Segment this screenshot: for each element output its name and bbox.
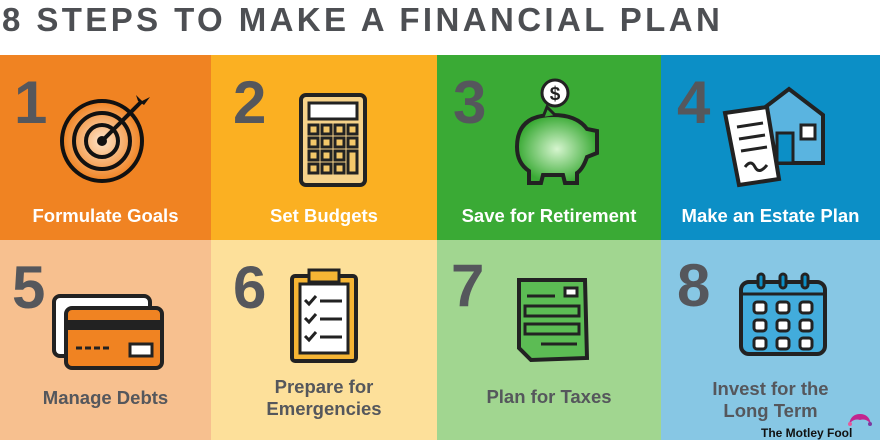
panel: make an estate plan: 4 [677,69,710,136]
logo: the motley fool: The Motley Fool [761,426,852,440]
label [712,378,829,421]
icon: house and document [722,86,825,188]
label: Formulate Goals [32,205,178,226]
panel: save for retirement [437,55,661,240]
panel: plan for taxes: 7 [451,252,484,319]
panel: set budgets: 2 [233,69,266,136]
label: Invest for the [712,378,829,399]
label: Emergencies [266,398,382,419]
panel: prepare for emergencies: 6 [233,254,266,321]
label: Save for Retirement [462,205,636,226]
label: Set Budgets [270,205,378,226]
panel: formulate goals [0,55,211,240]
panel: invest for the long term [661,240,880,440]
panel: manage debts [0,240,211,440]
panel: prepare for emergencies [211,240,437,440]
icon: calendar [739,272,827,356]
label: Long Term [723,400,818,421]
panel: make an estate plan [661,55,880,240]
label: Manage Debts [43,387,168,408]
panel: invest for the long term: 8 [677,252,710,319]
icon: piggy bank with coin [515,78,599,185]
icon: piggy bank with coin: $ [550,84,561,105]
icon: calculator [299,93,367,187]
panel: plan for taxes [437,240,661,440]
logo: the motley fool [761,414,872,440]
label: Prepare for [275,376,373,397]
label [266,376,382,419]
icon: credit cards [52,294,164,370]
panel: set budgets [211,55,437,240]
icon: target [60,95,150,183]
title: 8 STEPS TO MAKE A FINANCIAL PLAN [2,1,723,38]
label: Plan for Taxes [486,386,612,407]
label: Make an Estate Plan [682,205,859,226]
panel: save for retirement: 3 [453,69,486,136]
panel: formulate goals: 1 [14,69,47,136]
icon: clipboard checklist [290,268,358,363]
panel: manage debts: 5 [12,254,45,321]
icon: tax form [517,278,590,362]
